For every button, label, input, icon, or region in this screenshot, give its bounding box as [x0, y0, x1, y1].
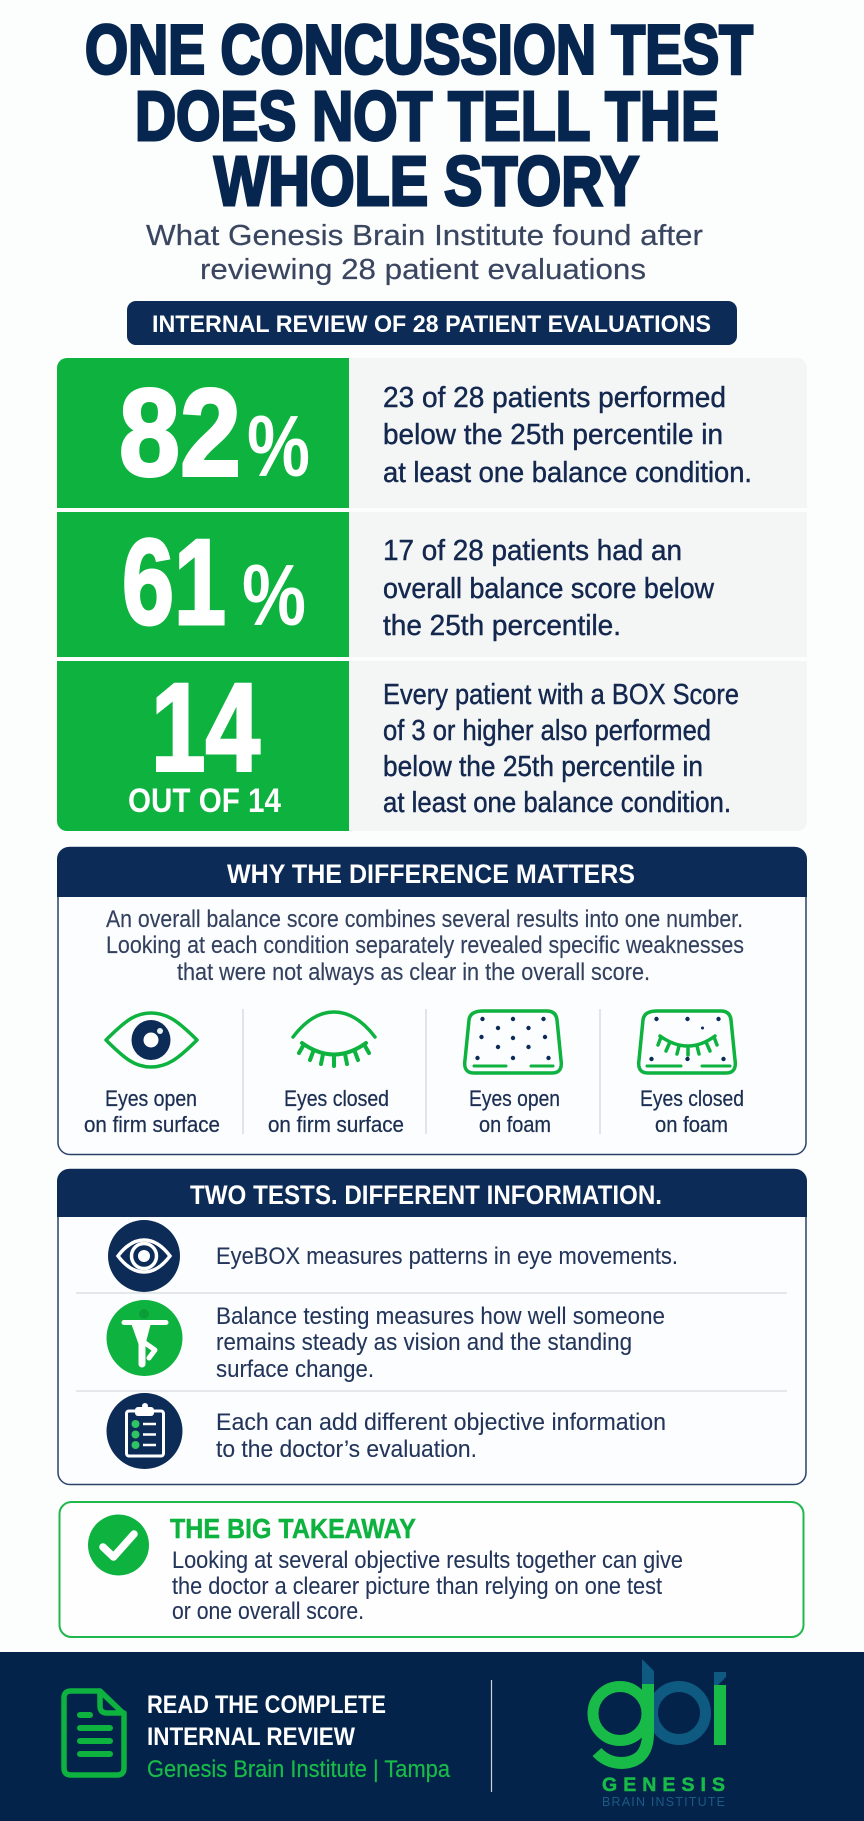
label: eyes open on firm surface [84, 1086, 220, 1137]
stat 82 percent: below the 25th percentile in [383, 419, 723, 451]
label: eyes open on foam [469, 1086, 560, 1137]
label: eyes open on firm surface: on firm surface [84, 1112, 220, 1137]
badge: internal review: INTERNAL REVIEW OF 28 PATIENT EVALUATIONS [152, 311, 711, 338]
body text: Looking at each condition separately revealed specific weaknesses [106, 932, 744, 959]
stat 61 percent: 61 [122, 514, 226, 650]
logo: gbi: BRAIN INSTITUTE [602, 1795, 725, 1809]
footer [0, 1652, 864, 1821]
icon: check circle [88, 1514, 149, 1576]
stat 14 out of 14: Every patient with a BOX Score [383, 679, 739, 711]
text: each can add: Each can add different objective information [216, 1409, 666, 1436]
stat 61 percent: overall balance score below [383, 573, 714, 605]
text: each can add: to the doctor’s evaluation. [216, 1436, 477, 1463]
dividers [243, 1009, 600, 1134]
stat 82 percent [57, 358, 752, 508]
text: balance testing: Balance testing measures how well someone [216, 1303, 665, 1330]
subtitle: What Genesis Brain Institute found after [146, 220, 703, 252]
footer divider [490, 1680, 492, 1792]
body text [106, 906, 744, 986]
panel heading [57, 1169, 807, 1217]
panel heading [57, 847, 807, 897]
icon: balance figure [106, 1300, 182, 1376]
stat 82 percent: 23 of 28 patients performed [383, 382, 726, 414]
stat 14 out of 14: 14 [151, 658, 260, 798]
stat 61 percent: % [242, 548, 306, 644]
logo: gbi: GENESIS [602, 1774, 725, 1796]
icon: eye closed [293, 1012, 375, 1066]
text: each can add [216, 1409, 666, 1463]
text: balance testing: surface change. [216, 1356, 374, 1383]
panel: statistics [57, 358, 807, 831]
stat 14 out of 14: OUT OF 14 [128, 782, 281, 820]
title: DOES NOT TELL THE [135, 77, 719, 155]
title: WHOLE STORY [214, 142, 639, 220]
footer text: READ THE COMPLETE [147, 1691, 386, 1719]
icon: document [64, 1691, 124, 1775]
icon: clipboard [106, 1393, 182, 1469]
panel: why the difference matters [57, 847, 807, 1154]
text: balance testing [216, 1303, 665, 1383]
icon: EyeBOX eye [108, 1220, 180, 1292]
takeaway text: the doctor a clearer picture than relying on one test [172, 1573, 662, 1600]
label: eyes open on foam: Eyes open [469, 1086, 560, 1111]
stat 82 percent: at least one balance condition. [383, 457, 752, 489]
row separator [57, 508, 807, 512]
stat 14 out of 14 [57, 658, 739, 831]
row separator [57, 657, 807, 661]
icon: eyes open on foam [465, 1011, 561, 1073]
row dividers [76, 1293, 787, 1391]
stat 14 out of 14: at least one balance condition. [383, 787, 731, 819]
text: balance testing: remains steady as vision and the standing [216, 1329, 632, 1356]
takeaway text: or one overall score. [172, 1598, 364, 1625]
label: eyes closed on foam: on foam [655, 1112, 728, 1137]
label: eyes open on firm surface: Eyes open [105, 1086, 197, 1111]
stat 82 percent: 82 [119, 364, 241, 502]
stat 61 percent [57, 512, 714, 657]
icon: eyes closed on foam [639, 1011, 735, 1073]
subtitle: reviewing 28 patient evaluations [200, 254, 646, 286]
subtitle [146, 220, 703, 286]
stat 14 out of 14: of 3 or higher also performed [383, 715, 711, 747]
panel heading: TWO TESTS. DIFFERENT INFORMATION. [190, 1180, 662, 1210]
footer text: INTERNAL REVIEW [147, 1723, 355, 1751]
footer text: Genesis Brain Institute | Tampa [147, 1756, 451, 1783]
text: EyeBOX: EyeBOX measures patterns in eye movements. [216, 1243, 678, 1270]
body text: that were not always as clear in the overall score. [177, 959, 650, 986]
icon: eye open [106, 1013, 197, 1067]
label: eyes closed on foam: Eyes closed [640, 1086, 744, 1111]
takeaway text [172, 1547, 683, 1625]
label: eyes open on foam: on foam [479, 1112, 551, 1137]
panel heading: WHY THE DIFFERENCE MATTERS [227, 859, 635, 889]
label: eyes closed on firm surface: on firm surface [268, 1112, 404, 1137]
takeaway heading: THE BIG TAKEAWAY [170, 1513, 416, 1544]
body text: An overall balance score combines several results into one number. [106, 906, 743, 933]
badge: internal review [127, 301, 737, 345]
panel: two tests [57, 1169, 807, 1484]
logo: gbi [593, 1659, 726, 1809]
stat 82 percent: % [247, 399, 310, 495]
footer text [147, 1691, 451, 1783]
stat 61 percent: 17 of 28 patients had an [383, 535, 682, 567]
stat 14 out of 14: below the 25th percentile in [383, 751, 703, 783]
takeaway text: Looking at several objective results together can give [172, 1547, 683, 1574]
panel: the big takeaway [60, 1502, 804, 1637]
title [85, 10, 753, 220]
label: eyes closed on foam [640, 1086, 744, 1137]
stat 61 percent: the 25th percentile. [383, 610, 621, 642]
label: eyes closed on firm surface: Eyes closed [284, 1086, 389, 1111]
label: eyes closed on firm surface [268, 1086, 404, 1137]
